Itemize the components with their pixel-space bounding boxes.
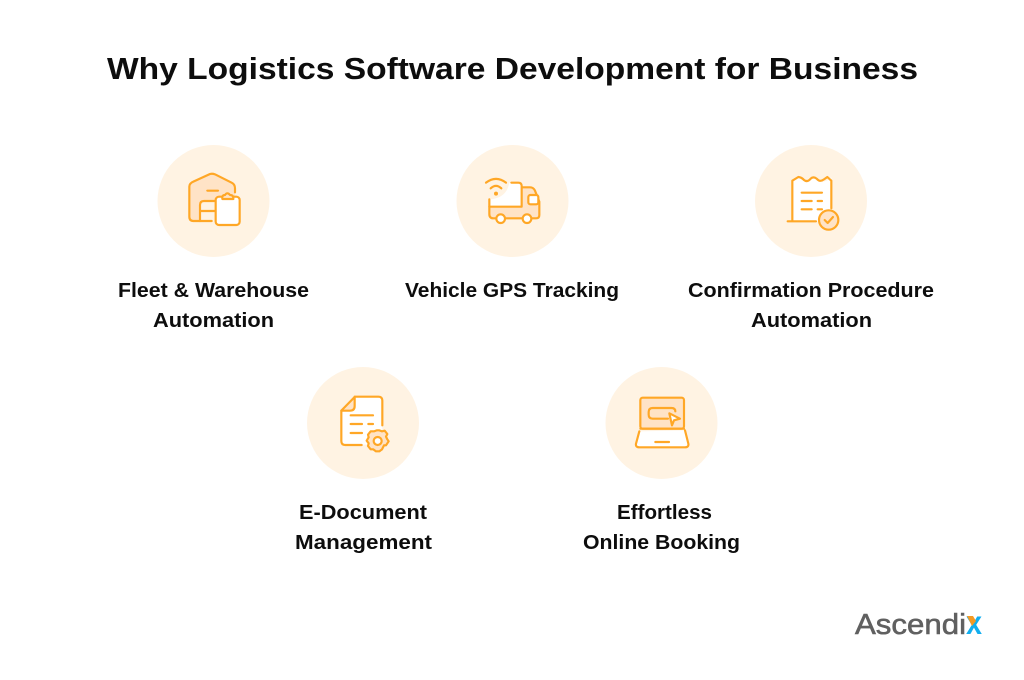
item: e-document management [295, 367, 432, 554]
label: Fleet & Warehouse [118, 280, 309, 302]
label line 2: Automation [153, 310, 274, 332]
item: effortless online booking [583, 367, 740, 554]
icon: laptop with cursor [606, 367, 718, 479]
item: confirmation procedure automation [688, 145, 934, 332]
label: E-Document [299, 502, 427, 524]
icon: truck with wifi [456, 145, 568, 257]
label line 2: Online Booking [583, 532, 740, 554]
item: fleet and warehouse automation [118, 145, 309, 332]
label line 2: Management [295, 532, 432, 554]
icon: document with gear [307, 367, 419, 479]
item: vehicle gps tracking [405, 145, 619, 302]
logo: Ascendix: x [966, 604, 983, 641]
logo: Ascendix: Ascendi [855, 609, 966, 641]
icon: receipt with check mark [755, 145, 867, 257]
title: Why Logistics Software Development for Business [107, 51, 918, 86]
icon: warehouse with clipboard [158, 145, 270, 257]
label: Effortless [617, 502, 712, 524]
label line 2: Automation [751, 310, 872, 332]
logo: Ascendix [855, 604, 983, 641]
label: Vehicle GPS Tracking [405, 280, 619, 302]
label: Confirmation Procedure [688, 280, 934, 302]
